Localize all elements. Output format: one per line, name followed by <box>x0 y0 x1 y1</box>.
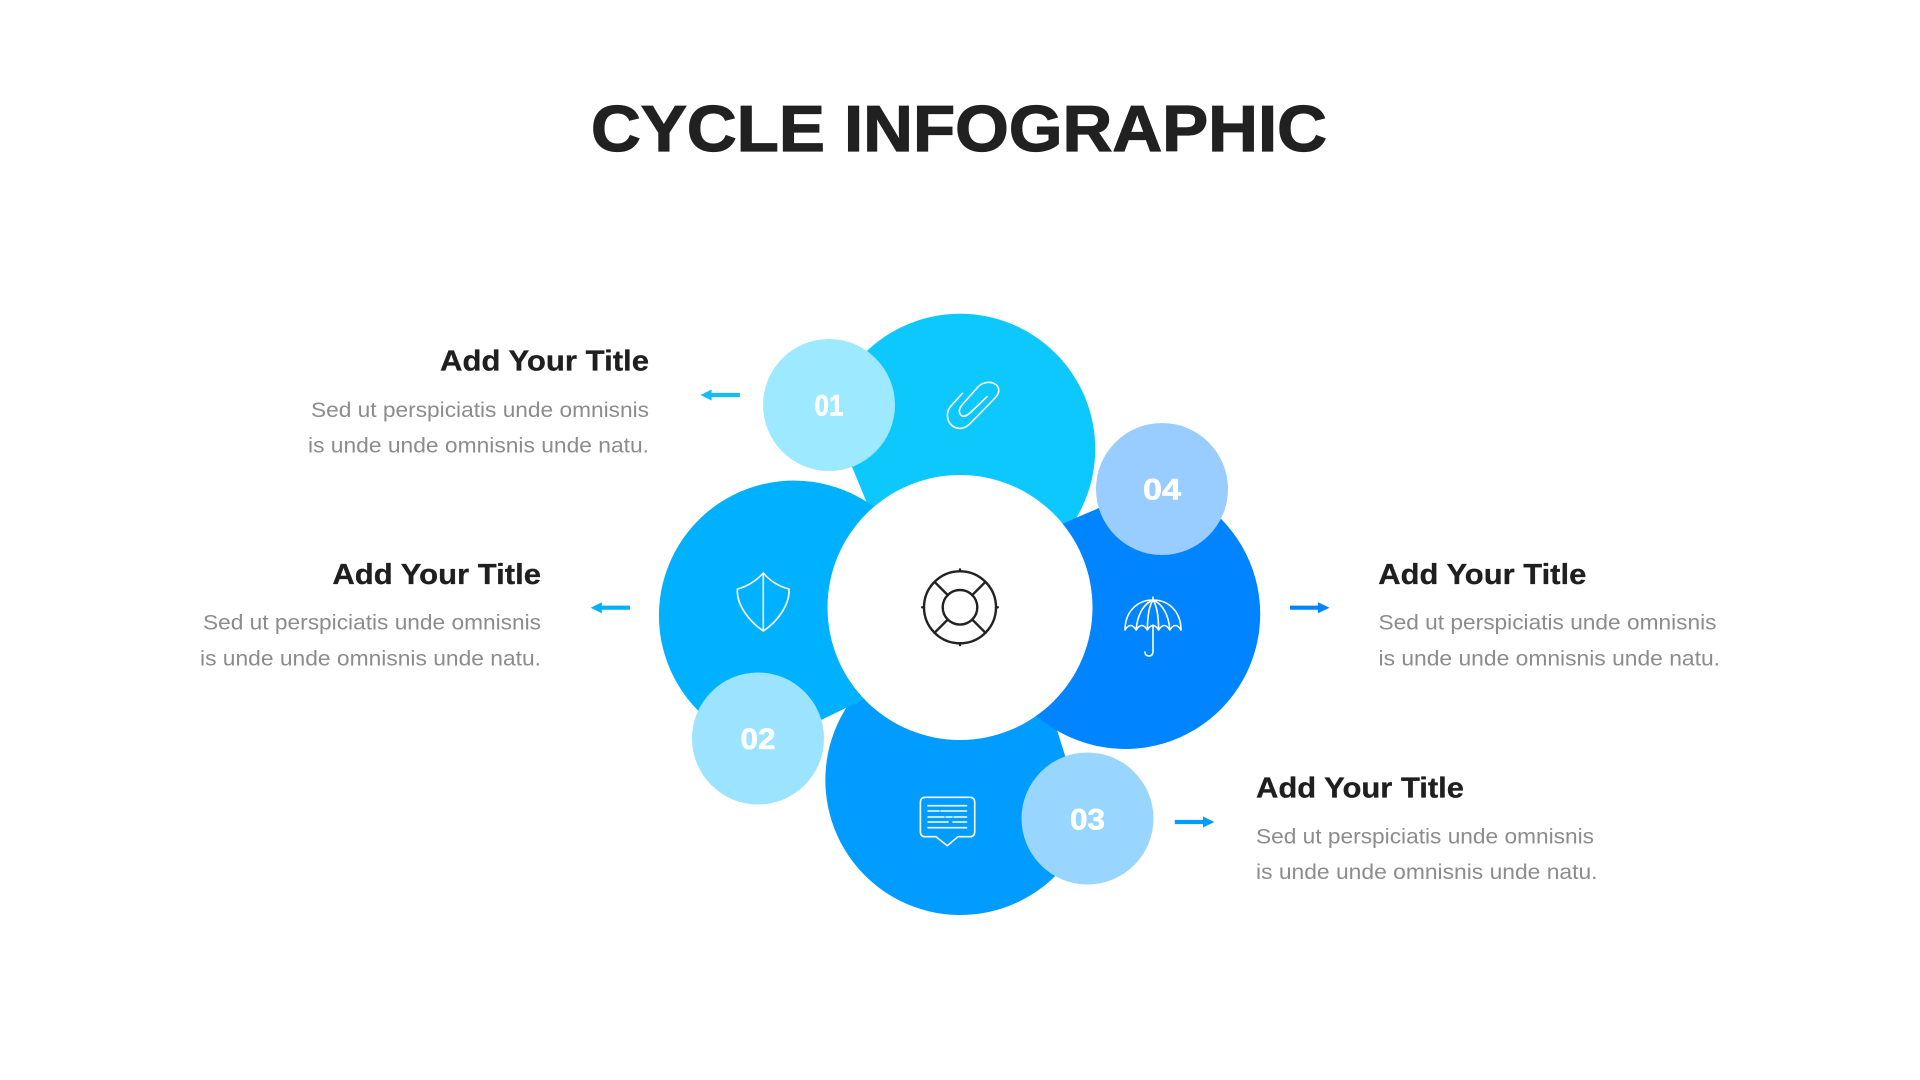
body: Sed ut perspiciatis unde omnisnis <box>311 399 649 422</box>
heading: Add Your Title <box>1378 559 1586 591</box>
center white circle <box>828 475 1092 740</box>
icon: chat message <box>920 797 975 846</box>
text block: item 2 <box>200 559 541 670</box>
icon: umbrella <box>1125 597 1181 656</box>
body: Sed ut perspiciatis unde omnisnis <box>1256 826 1594 848</box>
body <box>1378 612 1720 670</box>
text block: item 3 <box>1378 559 1720 670</box>
body: Sed ut perspiciatis unde omnisnis <box>203 612 541 635</box>
body: is unde unde omnisnis unde natu. <box>1378 647 1720 670</box>
icon: lifebuoy <box>922 570 998 645</box>
body <box>200 612 541 670</box>
icon: shield <box>737 573 789 631</box>
body: is unde unde omnisnis unde natu. <box>308 434 649 457</box>
badge 03: 03 <box>1070 804 1105 836</box>
arrow: item 1 <box>700 390 740 400</box>
body: Sed ut perspiciatis unde omnisnis <box>1378 612 1716 635</box>
heading: Add Your Title <box>1256 773 1464 805</box>
arrow: item 3 <box>1290 602 1330 613</box>
arrow: item 2 <box>591 602 630 613</box>
cycle diagram <box>659 314 1260 915</box>
badge 04 <box>1096 423 1228 555</box>
petal: left <box>659 481 921 735</box>
body <box>1256 826 1598 884</box>
petal: bottom <box>825 672 1082 915</box>
text block: item 4 <box>1256 773 1598 884</box>
badge 01 <box>763 339 895 471</box>
body: is unde unde omnisnis unde natu. <box>1256 861 1598 884</box>
petal: right <box>1011 479 1260 749</box>
heading: Add Your Title <box>440 346 649 378</box>
title: CYCLE INFOGRAPHIC <box>591 92 1327 165</box>
body: is unde unde omnisnis unde natu. <box>200 647 541 670</box>
badge 02 <box>692 672 824 804</box>
badge 02: 02 <box>740 723 776 756</box>
body <box>308 399 649 457</box>
badge 01: 01 <box>814 390 844 422</box>
heading: Add Your Title <box>332 559 541 591</box>
petal: top <box>850 314 1095 540</box>
text block: item 1 <box>308 346 649 457</box>
icon: paperclip <box>947 382 999 428</box>
arrow: item 4 <box>1175 816 1214 828</box>
badge 03 <box>1022 752 1154 884</box>
badge 04: 04 <box>1143 474 1181 506</box>
